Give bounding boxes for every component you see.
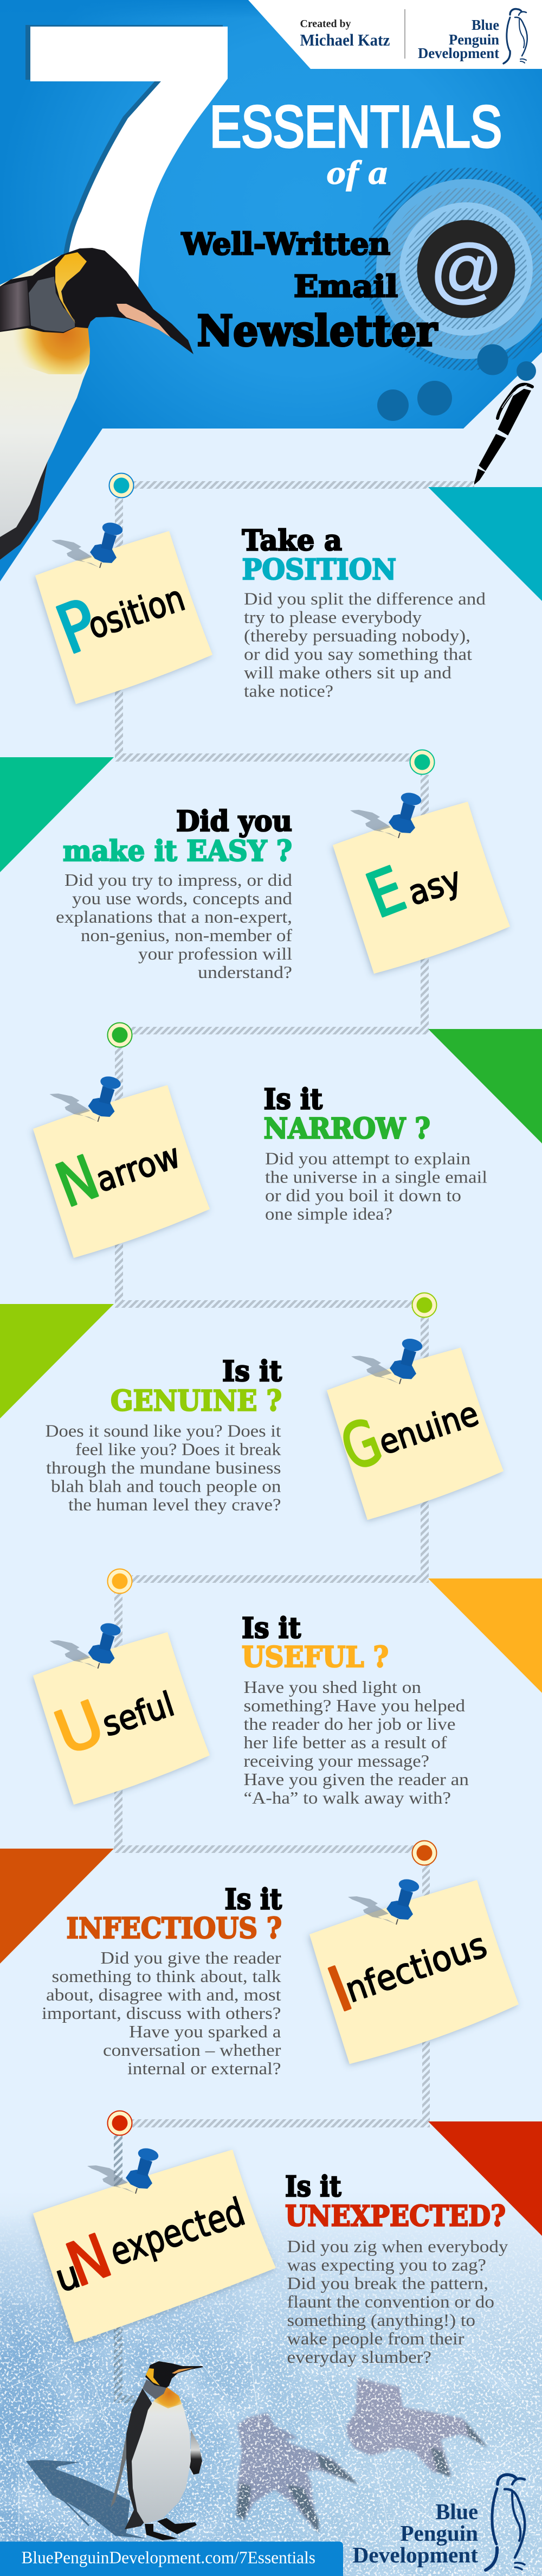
body text <box>56 870 292 982</box>
panel: is it useful <box>33 1569 542 1807</box>
sticky note: uNexpected <box>33 2150 276 2343</box>
corner triangle <box>428 487 542 601</box>
Blue Penguin Development logo <box>418 9 527 63</box>
step marker <box>107 1023 132 1047</box>
sticky note: Useful <box>33 1632 210 1805</box>
heading <box>66 1883 282 1945</box>
body text: Have you sparked a <box>129 2022 281 2041</box>
body text: will make others sit up and <box>244 663 451 682</box>
corner triangle <box>428 2121 542 2236</box>
ice background <box>0 2135 542 2576</box>
body text: was expecting you to zag? <box>287 2255 486 2274</box>
body text: through the mundane business <box>46 1458 281 1478</box>
sticky note: Narrow <box>33 1085 210 1258</box>
corner triangle <box>428 1029 542 1143</box>
body text: something (anything!) to <box>287 2310 475 2330</box>
connector end on ice <box>114 2135 136 2403</box>
panel: blue header <box>0 0 542 581</box>
sticky note: uNexpected: u <box>50 2252 85 2301</box>
body text: wake people from their <box>287 2329 464 2348</box>
body text: (thereby persuading nobody), <box>244 626 470 645</box>
sticky note: uNexpected: N <box>57 2221 120 2300</box>
body text: explanations that a non-expert, <box>56 907 292 926</box>
big numeral 7 shadow <box>25 25 223 286</box>
body text: internal or external? <box>127 2059 281 2078</box>
sticky note: Infectious <box>309 1880 519 2064</box>
icon: push pin <box>51 521 124 568</box>
panel: take a position <box>35 473 542 704</box>
icon: push pin <box>87 2146 159 2194</box>
icon: push pin <box>50 1621 122 1669</box>
body text: flaunt the convention or do <box>287 2292 494 2311</box>
sticky note: Narrow: N <box>47 1142 108 1220</box>
heading: INFECTIOUS ? <box>66 1912 282 1945</box>
body text: the human level they crave? <box>68 1495 281 1514</box>
header background <box>0 0 542 581</box>
icon: push pin <box>348 1877 420 1925</box>
sticky note: Easy: asy <box>403 859 466 913</box>
body text: important, discuss with others? <box>42 2003 281 2023</box>
heading: Did you <box>176 805 292 838</box>
standing king penguin <box>111 2361 203 2540</box>
corner triangle <box>428 1578 542 1693</box>
body text: Did you break the pattern, <box>287 2273 488 2293</box>
step marker <box>109 473 133 498</box>
body text: something? Have you helped <box>244 1696 465 1715</box>
connector path: hatched timeline <box>114 481 474 2127</box>
body text: everyday slumber? <box>287 2347 431 2367</box>
body text: “A-ha” to walk away with? <box>244 1788 451 1807</box>
credit text <box>300 18 390 49</box>
sticky note: Easy <box>333 802 510 974</box>
body text: feel like you? Does it break <box>75 1440 281 1459</box>
sticky note: Genuine: enuine <box>374 1394 483 1462</box>
sticky note: Useful: U <box>46 1687 113 1768</box>
body text: Did you give the reader <box>101 1948 281 1967</box>
body text: blah blah and touch people on <box>51 1476 281 1496</box>
corner triangle <box>0 757 114 872</box>
footer logo <box>352 2475 525 2570</box>
body text: receiving your message? <box>244 1751 429 1770</box>
big numeral 7 <box>30 27 228 287</box>
credit text: Created by <box>300 18 351 30</box>
sticky note: Genuine: G <box>332 1405 391 1485</box>
body text <box>244 589 486 701</box>
Blue Penguin Development logo: Penguin <box>449 31 499 48</box>
body text: the reader do her job or live <box>244 1714 455 1734</box>
heading: Is it <box>263 1083 322 1116</box>
at-sign target rings <box>365 168 542 370</box>
icon: push pin <box>50 1075 122 1122</box>
heading: NARROW ? <box>263 1112 430 1146</box>
step marker <box>107 1569 132 1594</box>
icon: at sign badge <box>417 220 515 318</box>
decorative dark dots <box>377 344 536 421</box>
heading <box>111 1355 282 1418</box>
footer URL bar <box>0 2542 343 2576</box>
body text: Have you shed light on <box>244 1677 421 1697</box>
footer logo: Penguin <box>400 2521 478 2546</box>
heading <box>242 1612 389 1674</box>
panel: make it easy <box>0 750 510 982</box>
title: Well-Written: Well-Written <box>181 226 390 261</box>
heading <box>242 524 396 586</box>
body text <box>265 1149 487 1224</box>
heading <box>263 1083 430 1146</box>
sticky note: Position <box>35 531 212 704</box>
Blue Penguin Development logo: Blue <box>472 17 499 33</box>
heading: POSITION <box>242 553 396 586</box>
step marker <box>412 1293 437 1317</box>
sticky note: uNexpected: expected <box>105 2189 250 2274</box>
body text: Have you given the reader an <box>244 1769 469 1789</box>
body text <box>244 1677 469 1807</box>
title: Newsletter: Newsletter <box>197 306 437 356</box>
large king penguin <box>0 248 193 560</box>
icon: push pin <box>350 791 422 838</box>
body text: Does it sound like you? Does it <box>46 1421 281 1441</box>
body text: her life better as a result of <box>244 1733 447 1752</box>
corner triangle <box>0 1304 114 1418</box>
penguin shadow on ice <box>26 2460 146 2539</box>
credit text: Michael Katz <box>300 30 390 49</box>
body text: Did you attempt to explain <box>265 1149 470 1168</box>
corner triangle <box>0 1849 114 1964</box>
step marker <box>412 1841 437 1865</box>
white credit banner <box>248 0 542 69</box>
sticky note: Useful: seful <box>98 1684 179 1744</box>
ice speckle texture <box>0 2232 542 2576</box>
body text: Did you zig when everybody <box>287 2236 508 2256</box>
heading <box>63 805 292 868</box>
sticky note: Position: osition <box>83 577 190 647</box>
body text: non-genius, non-member of <box>81 925 292 945</box>
footer URL bar: BluePenguinDevelopment.com/7Essentials <box>22 2547 315 2567</box>
icon: fountain pen <box>473 385 532 485</box>
heading: Take a <box>242 524 342 558</box>
step marker <box>410 750 435 775</box>
Blue Penguin Development logo: Development <box>418 45 499 61</box>
footer logo: Blue <box>436 2499 478 2524</box>
body text <box>42 1948 281 2078</box>
sticky note: Infectious: nfectious <box>340 1925 492 2011</box>
panel: is it infectious <box>0 1841 519 2078</box>
title: Email: Email <box>294 269 398 304</box>
icon: at sign badge: @ <box>431 229 501 309</box>
body text: something to think about, talk <box>52 1966 281 1986</box>
title: of a: of a <box>327 155 388 191</box>
sticky note: Narrow: arrow <box>91 1136 185 1200</box>
penguin foot prints in ice <box>236 2377 487 2533</box>
body text: the universe in a single email <box>265 1167 487 1187</box>
panel: is it unexpected <box>33 2111 542 2367</box>
heading: USEFUL ? <box>242 1641 389 1674</box>
sticky note: Infectious: I <box>319 1953 361 2026</box>
footer logo: Development <box>352 2542 478 2567</box>
sticky note: Position: P <box>47 585 108 670</box>
heading: GENUINE ? <box>111 1384 282 1418</box>
step marker <box>107 2111 132 2135</box>
body text <box>287 2236 508 2367</box>
body text: about, disagree with and, most <box>46 1985 281 2004</box>
heading <box>285 2170 506 2233</box>
panel: is it narrow <box>33 1023 542 1258</box>
heading: make it EASY ? <box>63 835 292 868</box>
sticky note: Easy: E <box>357 853 415 932</box>
body text: or did you say something that <box>244 644 472 664</box>
body text: or did you boil it down to <box>265 1186 461 1205</box>
body text: Did you try to impress, or did <box>64 870 292 890</box>
body text <box>46 1421 281 1514</box>
heading: Is it <box>242 1612 301 1645</box>
body text: take notice? <box>244 681 333 701</box>
heading: UNEXPECTED? <box>285 2200 506 2233</box>
heading: Is it <box>285 2170 341 2203</box>
body text: your profession will <box>138 944 292 963</box>
panel: is it genuine <box>0 1293 504 1520</box>
body text: conversation – whether <box>103 2040 281 2060</box>
heading: Is it <box>222 1355 282 1388</box>
heading: Is it <box>224 1883 282 1916</box>
body text: one simple idea? <box>265 1204 392 1224</box>
body text: you use words, concepts and <box>72 889 292 908</box>
icon: push pin <box>351 1337 423 1384</box>
body text: understand? <box>198 962 292 982</box>
body text: Did you split the difference and <box>244 589 486 609</box>
sticky note: Genuine <box>327 1347 504 1520</box>
body text: try to please everybody <box>244 608 422 627</box>
